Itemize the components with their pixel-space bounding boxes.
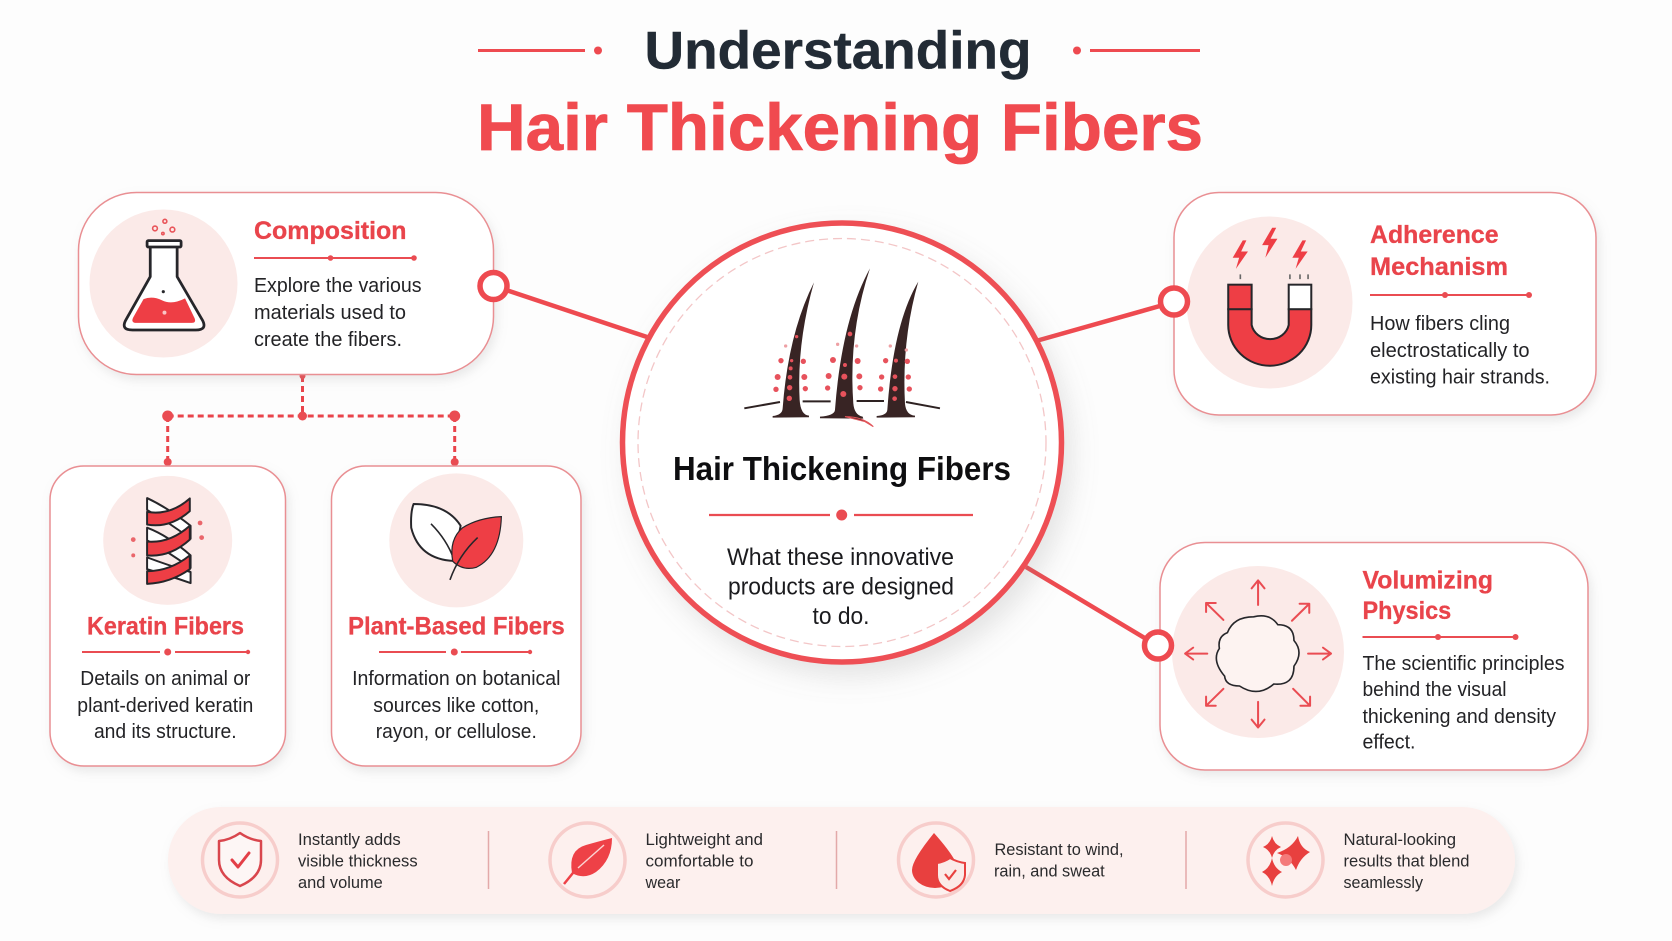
connector node (1160, 288, 1188, 315)
heading: keratin fibers: Keratin Fibers (87, 612, 244, 640)
text: lightweight (645, 830, 763, 892)
panel: adherence mechanism (1160, 192, 1596, 415)
text: center hub body: What these innovative (727, 544, 954, 571)
text: adherence body: existing hair strands. (1370, 366, 1550, 388)
panel: volumizing physics (1144, 542, 1588, 770)
connector node (480, 272, 507, 300)
icon: dna helix (103, 476, 232, 605)
text: plant-based body: sources like cotton, (373, 695, 539, 717)
icon: hair follicles (744, 268, 940, 427)
text: lightweight: comfortable to (646, 852, 754, 870)
text: volumizing body: thickening and density (1362, 706, 1556, 728)
text: lightweight: wear (645, 873, 681, 892)
divider (709, 510, 973, 520)
divider (379, 648, 532, 656)
dashed tree connector (162, 373, 460, 466)
text: composition body (254, 275, 422, 351)
title ornament left (478, 46, 602, 54)
heading: volumizing physics: Physics (1362, 597, 1451, 625)
text: center hub body (727, 544, 954, 630)
benefit: lightweight (550, 823, 763, 897)
divider (1370, 292, 1532, 298)
panel: composition (78, 192, 507, 374)
text: center hub body: products are designed (728, 574, 954, 600)
divider (254, 255, 417, 261)
connector: adherence to center (1036, 302, 1174, 341)
title line one: Understanding (644, 22, 1032, 80)
icon: shield check (202, 823, 278, 897)
divider (1362, 634, 1518, 640)
text: composition body: create the fibers. (254, 329, 402, 351)
connector: composition to center (494, 286, 650, 338)
icon: sparkles (1248, 823, 1323, 897)
text: keratin body: Details on animal or (80, 668, 251, 690)
text: resistant: Resistant to wind, (994, 840, 1124, 859)
heading: adherence mechanism: Adherence (1370, 221, 1499, 249)
text: resistant: rain, and sweat (994, 862, 1105, 880)
icon: leaves (389, 473, 523, 607)
text: plant-based body: rayon, or cellulose. (376, 721, 537, 743)
icon: feather (550, 823, 625, 897)
text: natural look: results that blend (1344, 852, 1470, 870)
benefit: resistant (898, 823, 1124, 897)
panel: plant-based fibers (332, 466, 581, 766)
text: plant-based body (352, 668, 560, 743)
text: natural look: Natural-looking (1344, 830, 1456, 849)
heading: adherence mechanism: Mechanism (1370, 253, 1508, 281)
connector: volumizing to center (1026, 567, 1158, 646)
panel: keratin fibers (50, 466, 286, 766)
title (477, 22, 1203, 164)
text: composition body: materials used to (254, 302, 406, 324)
text: keratin body: and its structure. (94, 721, 237, 743)
heading: center hub: Hair Thickening Fibers (673, 450, 1011, 487)
text: lightweight: Lightweight and (646, 830, 763, 849)
text: volumizing body: The scientific principles (1362, 653, 1564, 675)
panel: benefits strip (168, 807, 1515, 914)
text: adherence body: How fibers cling (1370, 313, 1510, 335)
divider (82, 648, 250, 656)
text: composition body: Explore the various (254, 275, 422, 297)
heading: adherence mechanism (1370, 221, 1508, 281)
text: plant-based body: Information on botanical (352, 668, 560, 690)
text: center hub body: to do. (812, 603, 870, 630)
text: thickness: and volume (298, 873, 383, 892)
text: adherence body: electrostatically to (1370, 340, 1530, 362)
icon: flask (90, 210, 238, 358)
text: thickness (298, 830, 418, 892)
text: resistant (994, 840, 1124, 880)
benefit: thickness (202, 823, 418, 897)
text: adherence body (1370, 313, 1550, 388)
icon: expanding cloud (1172, 566, 1344, 738)
text: keratin body: plant-derived keratin (77, 695, 253, 717)
text: natural look (1344, 830, 1470, 892)
text: natural look: seamlessly (1344, 873, 1423, 892)
text: volumizing body (1362, 653, 1564, 754)
heading: volumizing physics (1362, 566, 1493, 625)
text: thickness: Instantly adds (298, 830, 401, 849)
icon: drop with shield (898, 823, 974, 897)
icon: magnet (1186, 216, 1352, 388)
text: keratin body (77, 668, 253, 743)
text: volumizing body: behind the visual (1362, 679, 1506, 701)
text: volumizing body: effect. (1362, 732, 1416, 754)
title ornament right (1073, 46, 1200, 54)
heading: volumizing physics: Volumizing (1362, 566, 1493, 594)
heading: plant-based fibers: Plant-Based Fibers (348, 612, 565, 640)
heading: composition: Composition (254, 217, 406, 245)
panel: center hub (622, 223, 1062, 662)
connector node (1144, 632, 1172, 659)
title line two: Hair Thickening Fibers (477, 90, 1203, 164)
benefit: natural look (1248, 823, 1470, 897)
text: thickness: visible thickness (298, 852, 418, 870)
